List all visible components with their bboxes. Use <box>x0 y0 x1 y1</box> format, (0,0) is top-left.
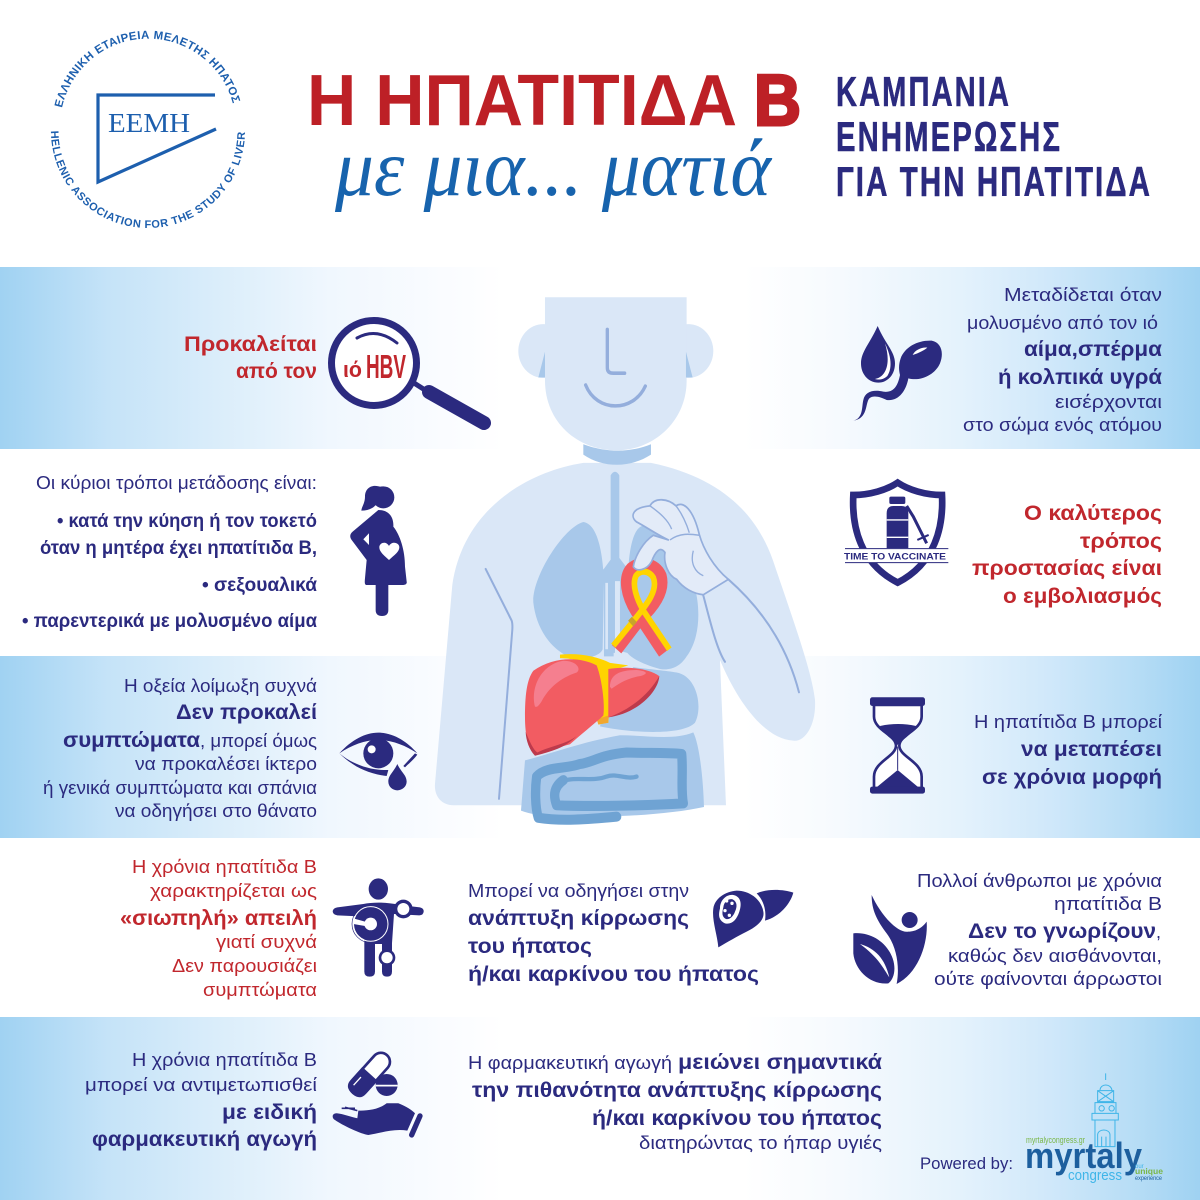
icon: clock tower <box>1092 1073 1118 1147</box>
logo: Hellenic Association for the Study of Liver: HELLENIC ASSOCIATION FOR THE STUDY OF LIVER <box>50 131 245 228</box>
text: caused by: από τον <box>236 360 317 383</box>
footer: powered by myrtaly congress: Powered by: <box>920 1155 1013 1173</box>
text: acute infection: να προκαλέσει ίκτερο <box>135 754 317 774</box>
text: many people do not know <box>917 871 1162 989</box>
text: many people do not know: Πολλοί άνθρωποι με χρόνια <box>917 871 1162 891</box>
text: how it is transmitted: στο σώμα ενός ατόμου <box>963 415 1162 435</box>
text: chronic hepatitis silent threat <box>120 857 317 1000</box>
text: best protection is vaccination: ο εμβολιασμός <box>1003 585 1162 608</box>
text: caused by: Προκαλείται <box>184 333 317 356</box>
title: Η ηπατίτιδα Β: Β <box>754 61 801 141</box>
footer: powered by myrtaly congress: experience <box>1135 1176 1163 1182</box>
text: medication reduces risk: την πιθανότητα ανάπτυξης κίρρωσης <box>472 1079 882 1102</box>
text: best protection is vaccination <box>972 502 1162 608</box>
torso and arm <box>435 463 815 805</box>
text: may become chronic: Η ηπατίτιδα Β μπορεί <box>974 712 1162 732</box>
icon: leaf person <box>853 895 927 984</box>
text: many people do not know: ηπατίτιδα Β <box>1054 894 1162 914</box>
text: many people do not know: , <box>1156 922 1161 942</box>
footer: powered by myrtaly congress: unique <box>1135 1167 1164 1176</box>
icon: vaccine shield: TIME TO VACCINATE <box>844 551 946 561</box>
logo: Hellenic Association for the Study of Liver: ΕΛΛΗΝΙΚΗ ΕΤΑΙΡΕΙΑ ΜΕΛΕΤΗΣ ΗΠΑΤΟΣ <box>54 30 240 108</box>
icon: liver with lesion <box>713 890 793 947</box>
icon: pregnant woman <box>350 486 407 616</box>
text: how it is transmitted <box>963 285 1162 435</box>
text: treatment can be managed: μπορεί να αντιμετωπισθεί <box>85 1075 317 1095</box>
text: acute infection: , μπορεί όμως <box>200 731 317 751</box>
background band: row 3 <box>0 656 1200 838</box>
text: medication reduces risk <box>468 1051 882 1153</box>
text: how it is transmitted: εισέρχονται <box>1055 392 1162 412</box>
central body illustration <box>435 297 815 820</box>
text: how it is transmitted: Μεταδίδεται όταν <box>1004 285 1162 305</box>
body crease lines <box>486 569 799 799</box>
text: can lead to cirrhosis <box>468 881 759 986</box>
footer: powered by myrtaly congress <box>920 1073 1164 1184</box>
icon: blood drop and sperm <box>853 326 942 421</box>
head <box>545 297 687 450</box>
icon: person with highlighted joints <box>333 878 424 977</box>
text: how it is transmitted: ή κολπικά υγρά <box>998 366 1162 389</box>
text: main transmission routes: • σεξουαλικά <box>202 575 317 596</box>
text: how it is transmitted: αίμα,σπέρμα <box>1024 338 1162 361</box>
text: acute infection: Η οξεία λοίμωξη συχνά <box>124 676 317 696</box>
footer: powered by myrtaly congress: our <box>1135 1164 1144 1170</box>
text: can lead to cirrhosis: ανάπτυξη κίρρωσης <box>468 907 689 930</box>
footer: powered by myrtaly congress: myrtaly <box>1025 1135 1142 1176</box>
face <box>586 329 645 406</box>
text: can lead to cirrhosis: Μπορεί να οδηγήσει στην <box>468 881 689 901</box>
text: may become chronic: σε χρόνια μορφή <box>982 766 1162 789</box>
text: best protection is vaccination: προστασίας είναι <box>972 557 1162 580</box>
text: acute infection: συμπτώματα <box>63 729 200 752</box>
background band: row 5 <box>0 1017 1200 1200</box>
ears <box>518 324 713 378</box>
text: acute infection: ή γενικά συμπτώματα και σπάνια <box>43 778 317 798</box>
icon: eye with tear <box>339 733 417 790</box>
hand holding ribbon <box>633 500 728 595</box>
text: many people do not know: καθώς δεν αισθάνονται, <box>948 946 1162 966</box>
text: best protection is vaccination: Ο καλύτερος <box>1024 502 1162 525</box>
text: medication reduces risk: Η φαρμακευτική αγωγή <box>468 1053 672 1073</box>
intestines <box>521 732 704 817</box>
text: many people do not know: ούτε φαίνονται άρρωστοι <box>934 969 1162 989</box>
text: may become chronic <box>974 712 1162 789</box>
text: medication reduces risk: διατηρώντας το ήπαρ υγιές <box>639 1133 882 1153</box>
background band: row 1 <box>0 267 1200 449</box>
campaign heading: ΚΑΜΠΑΝΙΑ <box>836 68 1011 115</box>
liver <box>525 654 659 756</box>
title: Η ηπατίτιδα Β: Η ΗΠΑΤΙΤΙΔΑ <box>307 61 737 141</box>
stomach <box>600 667 698 732</box>
ear shadows <box>538 352 693 378</box>
text: how it is transmitted: μολυσμένο από τον ιό <box>967 313 1158 333</box>
text: acute infection <box>43 676 317 821</box>
text: main transmission routes <box>22 473 317 632</box>
text: can lead to cirrhosis: ή/και καρκίνου του ήπατος <box>468 963 759 986</box>
text: acute infection: να οδηγήσει στο θάνατο <box>115 801 317 821</box>
icon: pills over a hand <box>333 1048 420 1135</box>
text: chronic hepatitis silent threat: Δεν παρουσιάζει <box>172 956 317 976</box>
text: treatment can be managed: φαρμακευτική αγωγή <box>92 1128 317 1151</box>
text: main transmission routes: όταν η μητέρα έχει ηπατίτιδα Β, <box>40 538 317 559</box>
icon: hourglass <box>870 697 925 794</box>
text: main transmission routes: • παρεντερικά με μολυσμένο αίμα <box>22 611 317 632</box>
logo: Hellenic Association for the Study of Liver: ΕΕΜΗ <box>108 108 190 138</box>
footer: powered by myrtaly congress: myrtalycongress.gr <box>1026 1135 1085 1145</box>
lungs and trachea <box>533 472 698 732</box>
text: can lead to cirrhosis: του ήπατος <box>468 935 592 958</box>
campaign heading: ΕΝΗΜΕΡΩΣΗΣ <box>836 113 1062 160</box>
text: treatment can be managed <box>85 1050 317 1151</box>
text: main transmission routes: Οι κύριοι τρόποι μετάδοσης είναι: <box>36 473 317 493</box>
icon: magnifier with HBV virus <box>332 320 484 423</box>
footer: powered by myrtaly congress: congress <box>1068 1167 1122 1184</box>
awareness ribbon <box>613 564 669 653</box>
text: chronic hepatitis silent threat: χαρακτηρίζεται ως <box>150 881 317 901</box>
text: treatment can be managed: Η χρόνια ηπατίτιδα Β <box>132 1050 317 1070</box>
text: chronic hepatitis silent threat: γιατί συχνά <box>216 932 317 952</box>
icon: vaccine shield <box>843 483 949 583</box>
text: many people do not know: Δεν το γνωρίζουν <box>968 920 1156 943</box>
text: best protection is vaccination: τρόπος <box>1080 530 1162 553</box>
spine gap <box>607 583 615 660</box>
text: acute infection: Δεν προκαλεί <box>176 701 317 724</box>
text: caused by <box>184 333 317 383</box>
text: treatment can be managed: με ειδική <box>222 1101 317 1124</box>
subtitle: με μια... ματιά: με μια... ματιά <box>334 125 773 213</box>
text: chronic hepatitis silent threat: Η χρόνια ηπατίτιδα Β <box>132 857 317 877</box>
text: medication reduces risk: μειώνει σημαντικά <box>678 1051 882 1074</box>
text: chronic hepatitis silent threat: «σιωπηλή» απειλή <box>120 907 317 930</box>
text: medication reduces risk: ή/και καρκίνου του ήπατος <box>592 1107 882 1130</box>
icon: magnifier with HBV virus: HBV <box>366 348 406 385</box>
neck <box>583 444 651 465</box>
icon: magnifier with HBV virus: ιό <box>343 357 362 382</box>
logo: Hellenic Association for the Study of Liver <box>50 30 245 228</box>
text: main transmission routes: • κατά την κύηση ή τον τοκετό <box>57 511 317 532</box>
text: chronic hepatitis silent threat: συμπτώματα <box>203 980 317 1000</box>
text: may become chronic: να μεταπέσει <box>1021 738 1162 761</box>
campaign heading <box>836 68 1152 205</box>
